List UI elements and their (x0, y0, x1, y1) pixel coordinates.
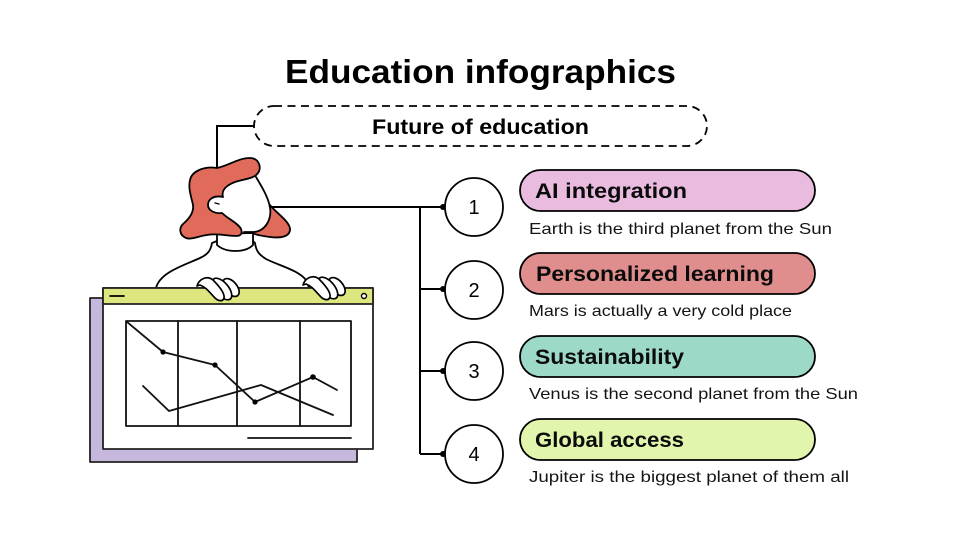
item 4 number: 4 (468, 444, 480, 466)
left hand (197, 275, 242, 303)
illustration: person with chart board (90, 158, 373, 462)
body (156, 241, 310, 290)
face (215, 176, 270, 232)
hair (180, 158, 260, 239)
item 2 number (440, 261, 503, 319)
jaw line (244, 177, 270, 232)
item 2 number: 2 (468, 280, 480, 302)
item 2 description: Mars is actually a very cold place (529, 303, 792, 320)
item 1 number: 1 (468, 197, 480, 219)
item 3 number: 3 (468, 361, 480, 383)
back panel (90, 298, 357, 462)
item 4 pill: Global access (535, 429, 684, 452)
callout: Future of education: Future of education (372, 116, 589, 139)
window controls (110, 295, 124, 297)
item 3 pill (520, 336, 815, 377)
connector: person to numbered list (272, 207, 444, 454)
neck (217, 233, 253, 251)
item 1 pill: AI integration (535, 180, 687, 203)
item 4 number (440, 425, 503, 483)
item 4 pill (520, 419, 815, 460)
item 1 pill (520, 170, 815, 211)
item 1 number (440, 178, 503, 236)
item 1 description: Earth is the third planet from the Sun (529, 221, 832, 238)
right hair (252, 205, 290, 237)
connector: callout to person (217, 126, 254, 168)
line chart (126, 321, 351, 438)
right hand (303, 274, 348, 302)
item 4 description: Jupiter is the biggest planet of them all (529, 469, 849, 486)
item 3 description: Venus is the second planet from the Sun (529, 386, 858, 403)
title: Education infographics (285, 53, 676, 90)
item 2 pill: Personalized learning (536, 263, 774, 286)
item 3 number (440, 342, 503, 400)
chart window (103, 288, 373, 449)
window header bar (103, 288, 373, 304)
callout: Future of education (254, 106, 707, 146)
item 3 pill: Sustainability (535, 346, 684, 369)
item 2 pill (520, 253, 815, 294)
ear mark (215, 203, 219, 204)
